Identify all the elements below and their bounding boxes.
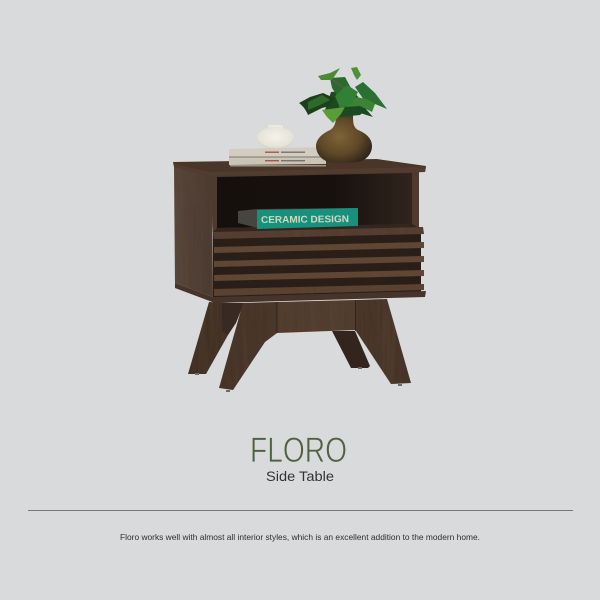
top-left small leaf [318,68,340,80]
right mid leaf [345,97,375,112]
center top leaf [330,77,352,100]
open shelf interior [217,173,412,228]
front left leg [219,302,277,390]
subtitle: Side Table [266,469,334,484]
back right leg [332,331,370,368]
front bottom leaf [322,107,345,123]
yellow-green left highlight [308,95,330,110]
drawer dark backing [213,227,421,299]
right large leaf [355,82,387,109]
title: FLORO [250,431,347,470]
cabinet left side panel [174,166,213,297]
white ceramic pot [256,125,294,149]
leg seams [277,300,356,333]
back left leg [188,302,230,374]
dark left leaf [299,93,334,115]
leaf mass shadow [325,90,368,117]
top panel [173,159,426,176]
front apron [277,300,356,333]
front right leg [356,299,411,384]
side apron [222,303,244,335]
divider rule [28,510,573,511]
cabinet bottom panel [175,283,426,303]
stacked books [229,147,326,166]
top panel front edge [174,164,426,176]
drawer slats [213,227,424,296]
plant leaves [299,67,387,123]
description: Floro works well with almost all interior styles, which is an excellent addition to the modern home. [120,532,480,542]
side table product photo [173,67,426,392]
teal book: Ceramic Design: CERAMIC DESIGN [261,214,349,226]
shelf lip [213,224,419,232]
center vein [333,80,349,92]
teal book: Ceramic Design [238,208,358,229]
bronze vase [316,115,372,163]
bright center leaf [335,85,358,108]
lower right leaf [345,108,373,117]
top small leaf [351,67,361,80]
cabinet front frame [210,171,419,234]
leg feet [195,367,402,392]
